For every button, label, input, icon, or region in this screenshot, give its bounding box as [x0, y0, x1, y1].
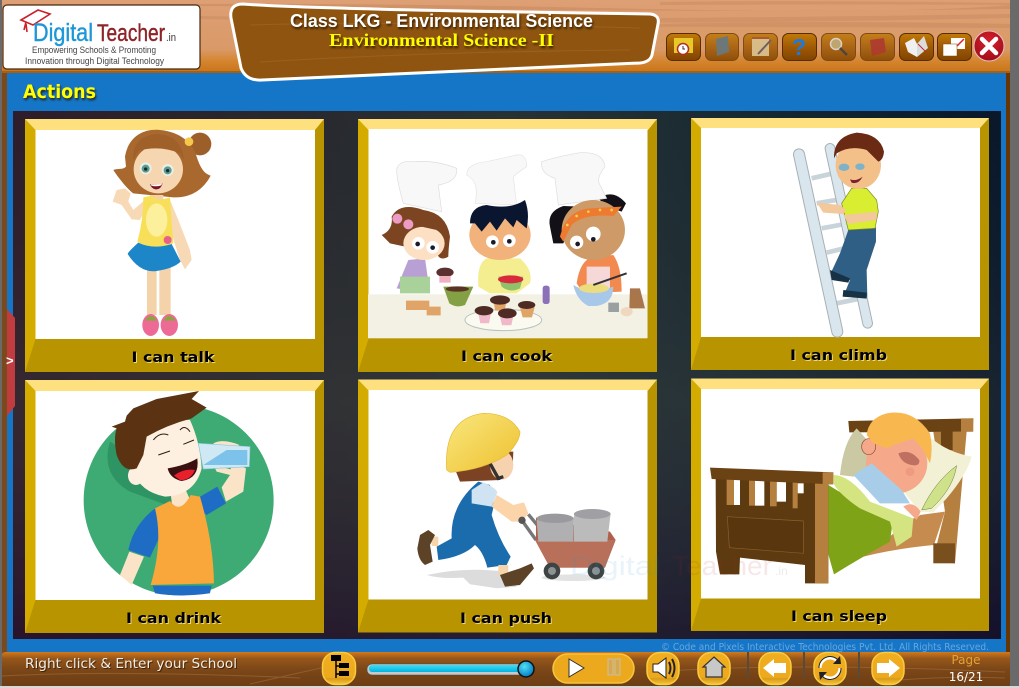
logo wordmark: Teacher: [97, 20, 165, 47]
divider: [858, 652, 860, 678]
icon: history folder: [666, 34, 700, 60]
status text: Right click & Enter your School: [25, 656, 237, 672]
logo wordmark: [33, 19, 176, 47]
logo wordmark: .in: [166, 32, 176, 44]
right wood border: [1006, 73, 1010, 653]
icon: resize: [938, 34, 972, 60]
frame: [358, 380, 657, 632]
top wooden bar: [2, 0, 1010, 73]
copyright: © Code and Pixels Interactive Technologies Pvt. Ltd. All Rights Reserved.: [661, 642, 989, 653]
icon: magnifier: [822, 34, 856, 60]
caption: I can push: [460, 611, 552, 627]
heading: class: Class LKG - Environmental Science: [290, 11, 593, 31]
button: refresh: [814, 652, 846, 684]
button: home: [698, 652, 730, 684]
icon: help: ?: [792, 34, 806, 60]
watermark: [570, 551, 788, 581]
caption: I can climb: [790, 348, 887, 364]
button: next: [872, 652, 904, 684]
slider knob: [518, 661, 534, 677]
bottom wooden bar: [0, 652, 1019, 688]
page indicator: [949, 653, 983, 684]
icon: play: [569, 659, 584, 677]
card: I can sleep: [691, 378, 989, 631]
play and pause control: [553, 654, 634, 683]
card: I can push: [358, 380, 657, 632]
card: I can drink: [25, 380, 324, 633]
frame: [25, 380, 324, 633]
icon: notepad: [744, 34, 778, 60]
page heading: Actions: [23, 81, 96, 103]
divider: [747, 652, 749, 678]
dark content panel: [13, 111, 1001, 639]
illustration: boy climbing a ladder: [799, 133, 884, 332]
logo tagline: Empowering Schools & Promoting: [32, 45, 156, 55]
page indicator: Page: [951, 653, 981, 667]
icon: pause: [608, 659, 620, 675]
icon: graduation cap: [21, 10, 50, 32]
caption: I can cook: [461, 349, 553, 365]
logo wordmark: Digital: [33, 19, 93, 47]
page indicator: 16/21: [949, 670, 983, 684]
title plaque: [231, 4, 658, 80]
logo tagline: [25, 45, 164, 66]
side tab: [6, 309, 15, 416]
toolbar buttons: [666, 31, 1004, 61]
card: I can cook: [358, 119, 657, 372]
logo tagline: Innovation through Digital Technology: [25, 56, 164, 66]
caption: I can drink: [126, 611, 222, 627]
illustration: girl talking: [113, 130, 211, 336]
frame: [358, 119, 657, 372]
heading: book: Environmental Science -II: [329, 30, 554, 50]
illustration: boy sleeping in bed: [710, 412, 973, 583]
frame: [691, 118, 989, 370]
button: sound: [647, 652, 679, 684]
side tab: >: [6, 353, 14, 368]
illustration: boy drinking water: [84, 391, 274, 595]
divider: [803, 652, 805, 678]
frame: [691, 378, 989, 631]
caption: I can talk: [132, 350, 215, 366]
illustration: worker pushing a cart: [417, 413, 616, 588]
icon: dictionary: [860, 34, 894, 60]
progress slider: [367, 661, 534, 677]
illustration: children cooking: [368, 153, 647, 338]
frame: [25, 119, 324, 372]
button: previous: [759, 652, 791, 684]
card: I can climb: [691, 118, 989, 370]
logo card: [3, 5, 200, 69]
icon: help: [782, 34, 816, 60]
left wood border: [2, 73, 7, 653]
watermark: Digital: [570, 551, 660, 581]
button: table of contents: [322, 652, 356, 684]
card: I can talk: [25, 119, 324, 372]
icon: open book: [900, 34, 934, 60]
caption: I can sleep: [791, 609, 887, 625]
icon: close: [974, 31, 1004, 61]
icon: reference book: [706, 34, 738, 60]
watermark: Teacher: [672, 551, 772, 581]
watermark: .in: [775, 564, 788, 578]
